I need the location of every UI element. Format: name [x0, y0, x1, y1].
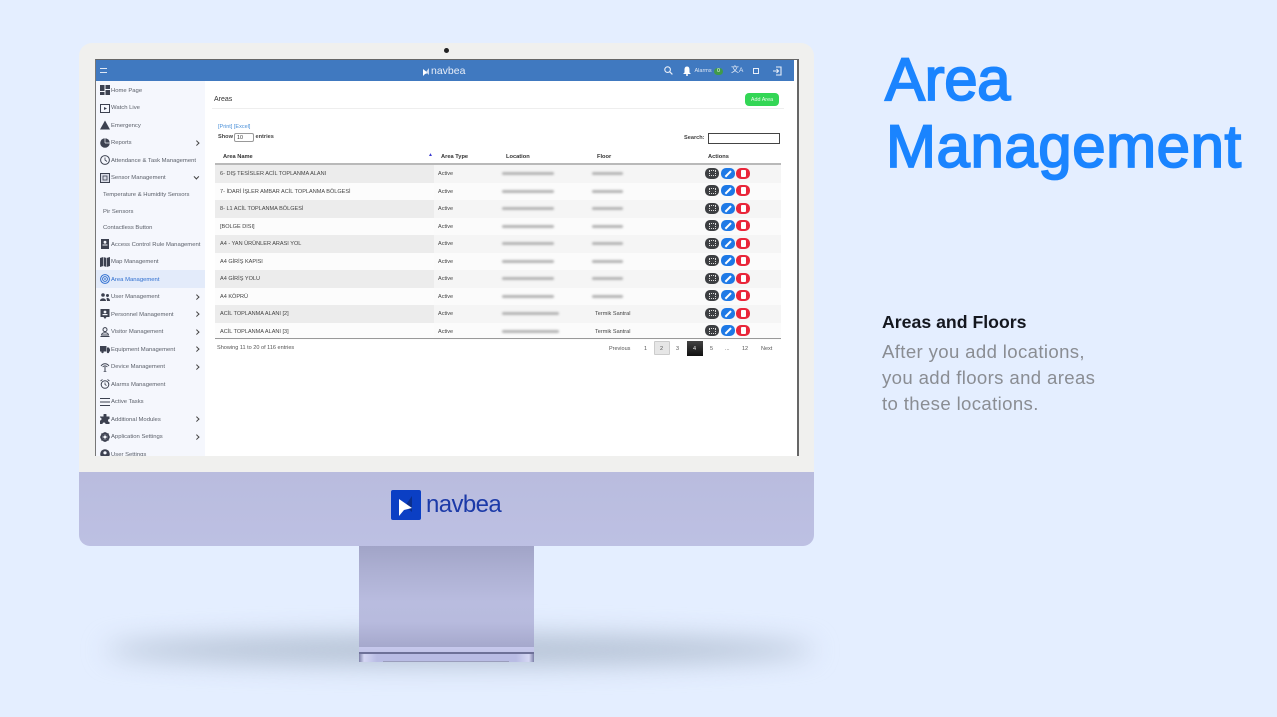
row 1: [215, 165, 781, 182]
menu: Active Tasks: Active Tasks: [111, 399, 144, 405]
menu: Equipment Management: Equipment Management: [111, 346, 175, 352]
row 10: Active: [438, 328, 453, 334]
page heading: Areas: [214, 96, 232, 103]
row 5: Active: [438, 241, 453, 247]
table header: Floor: [597, 154, 611, 160]
menu: Access Control Rule Management: Access Control Rule Management: [111, 242, 200, 248]
pagination: 12: [742, 346, 748, 352]
table header: Location: [506, 154, 530, 160]
menu: Alarms Management: [100, 379, 166, 389]
table header: Area Name: [223, 154, 253, 160]
pagination: 4: [693, 346, 696, 352]
row 7: A4 GİRİŞ YOLU: [220, 276, 260, 282]
row 4: [215, 218, 781, 235]
alarms label: Alarms: [694, 68, 712, 74]
menu: Watch Live: Watch Live: [111, 105, 140, 111]
alarm count badge: 0: [717, 68, 720, 74]
title: Area: [885, 46, 1010, 113]
icon: menu: [100, 68, 107, 73]
title: [884, 46, 1242, 180]
menu: Sensor Management: [100, 173, 200, 183]
row 4: [BOLGE DISI]: [220, 224, 255, 230]
floor shadow under monitor: [105, 635, 815, 665]
submenu: Pir Sensors: Pir Sensors: [103, 208, 133, 214]
icon: exit: [773, 66, 782, 76]
row 1: 6- DIŞ TESİSLER ACİL TOPLANMA ALANI: [220, 171, 326, 177]
menu: Area Management (active): [100, 274, 160, 284]
menu: Application Settings: [100, 432, 200, 442]
row 4: Active: [438, 224, 453, 230]
row 3: Active: [438, 206, 453, 212]
row 7: [215, 270, 781, 288]
menu: Home Page: Home Page: [111, 88, 142, 94]
search control: Search:: [684, 135, 705, 141]
menu: User Settings: [100, 449, 146, 456]
icon: translate: 文A: [731, 64, 743, 74]
row 3: [215, 200, 781, 218]
row 5: [215, 235, 781, 252]
row 2: Active: [438, 188, 453, 194]
pagination: 1: [644, 346, 647, 352]
row 9: ACİL TOPLANMA ALANI [2]: [220, 311, 289, 317]
menu: Personnel Management: [100, 309, 200, 319]
menu: Device Management: Device Management: [111, 364, 165, 370]
navbea logo mark: [391, 490, 421, 520]
row 9: Termik Santral: [595, 311, 630, 317]
description: you add floors and areas: [882, 367, 1095, 388]
pagination: 3: [676, 346, 679, 352]
menu: Application Settings: Application Settings: [111, 434, 163, 440]
menu: User Management: User Management: [111, 294, 159, 300]
table header: Actions: [708, 154, 729, 160]
stand foot: [359, 654, 534, 662]
row 8: Active: [438, 294, 453, 300]
table header: Area Type: [441, 154, 468, 160]
title: Management: [886, 113, 1242, 180]
menu: Attendance and Task Management: [100, 155, 196, 165]
table rows: [215, 165, 781, 339]
screen: [95, 59, 799, 456]
description: After you add locations,: [882, 341, 1085, 362]
menu: Active Tasks: [100, 398, 144, 406]
menu: Home Page: [100, 85, 142, 95]
print excel links: [Print] [Excel]: [218, 124, 250, 130]
menu: Visitor Management: [100, 327, 200, 337]
navbar logo mark: [423, 68, 429, 76]
main content: Areas table page: [212, 93, 784, 356]
menu: User Management: [100, 293, 200, 301]
table header: ▲: [428, 152, 433, 158]
pagination: 2: [660, 346, 663, 352]
submenu: Contactless Button: Contactless Button: [103, 225, 152, 231]
icon: search: [664, 66, 673, 75]
menu: Attendance and Task Management: Attendance & Task Management: [111, 158, 196, 164]
navbar logo text: navbea: [431, 64, 465, 76]
pagination: [609, 341, 772, 356]
monitor stand: [359, 546, 534, 662]
table header: [215, 152, 781, 165]
menu: Alarms Management: Alarms Management: [111, 382, 165, 388]
menu: Reports: Reports: [111, 140, 132, 146]
menu: Watch Live: [100, 104, 140, 113]
row 10: [215, 322, 781, 340]
menu: Additional Modules: Additional Modules: [111, 416, 161, 422]
main content: Areas table page: entries: [256, 134, 274, 140]
row 2: [215, 182, 781, 200]
row 6: Active: [438, 258, 453, 264]
stand lip: [359, 647, 534, 654]
alarm count badge: [714, 68, 723, 74]
add area button: [745, 92, 779, 106]
menu: Reports: [100, 138, 200, 148]
menu: Sensor Management: Sensor Management: [111, 175, 166, 181]
icon: bell: [683, 66, 691, 76]
row 2: 7- İDARİ İŞLER AMBAR ACİL TOPLANMA BÖLGESİ: [220, 188, 351, 194]
row 10: Termik Santral: [595, 328, 630, 334]
subheading: Areas and Floors: [882, 312, 1026, 332]
pagination: Next: [761, 346, 772, 352]
pagination: Previous: [609, 346, 630, 352]
description: [882, 341, 1095, 414]
monitor chin with logo: [79, 472, 814, 546]
menu: Map Management: [100, 257, 158, 267]
row 3: 8- L1 ACİL TOPLANMA BÖLGESİ: [220, 206, 303, 212]
description: to these locations.: [882, 393, 1039, 414]
row 9: Active: [438, 311, 453, 317]
menu: Equipment Management: [100, 346, 200, 354]
submenu: Temperature and Humidity Sensors: Temperature & Humidity Sensors: [103, 192, 189, 198]
navbea logo text: navbea: [426, 491, 501, 518]
row 8: [215, 288, 781, 305]
stand neck: [359, 546, 534, 647]
menu: Personnel Management: Personnel Management: [111, 312, 174, 318]
menu: Visitor Management: Visitor Management: [111, 329, 163, 335]
menu: Emergency: Emergency: [111, 122, 141, 128]
menu: Access Control Rule Management: [101, 239, 200, 249]
icon: fullscreen: [753, 68, 759, 74]
main content: Areas table page: 10: [237, 135, 243, 141]
add area button: Add Area: [751, 96, 773, 102]
menu: Map Management: Map Management: [111, 259, 158, 265]
row 8: A4 KÖPRÜ: [220, 294, 248, 300]
monitor bezel: [79, 43, 814, 472]
row 7: Active: [438, 276, 453, 282]
camera: [444, 48, 449, 53]
top navigation bar: [96, 60, 794, 81]
menu: Additional Modules: [100, 414, 200, 424]
menu: Device Management: [100, 363, 200, 372]
pagination: 5: [710, 346, 713, 352]
sidebar menu: [100, 85, 200, 456]
row 6: A4 GİRİŞ KAPISI: [220, 258, 263, 264]
row 5: A4 - YAN ÜRÜNLER ARASI YOL: [220, 241, 301, 247]
row 1: Active: [438, 171, 453, 177]
row 10: ACİL TOPLANMA ALANI [3]: [220, 328, 289, 334]
pagination: ...: [725, 346, 730, 352]
row 9: [215, 305, 781, 322]
menu: Area Management (active): Area Management: [111, 276, 159, 282]
foot centre edge: [383, 661, 509, 662]
menu: Emergency: [100, 120, 141, 130]
show entries control: Show: [218, 134, 233, 140]
table info text: Showing 11 to 20 of 116 entries: [217, 345, 294, 351]
active menu highlight: [96, 270, 205, 288]
row 6: [215, 252, 781, 270]
sidebar: [96, 81, 205, 456]
